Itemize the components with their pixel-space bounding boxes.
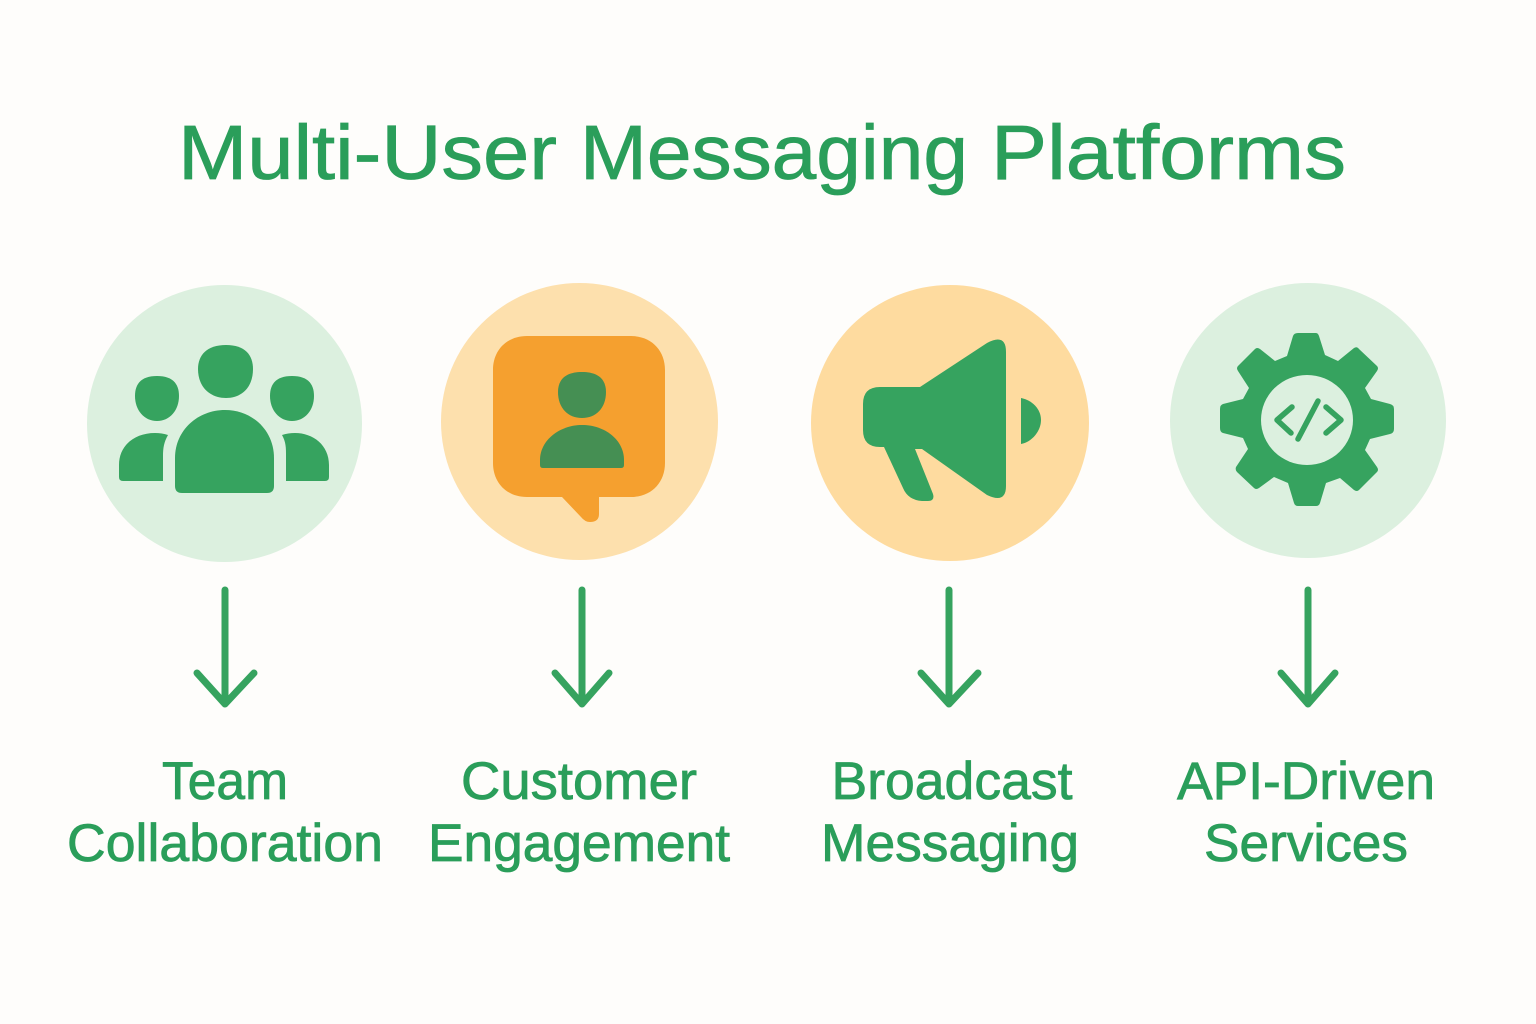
icon: customer chat xyxy=(441,283,718,560)
icon: megaphone xyxy=(811,285,1089,561)
arrow: team xyxy=(197,590,254,704)
label: team collaboration xyxy=(67,752,383,873)
title: Messaging xyxy=(580,110,968,196)
panel: customer engagement xyxy=(428,283,730,873)
arrow: broadcast xyxy=(921,590,978,704)
title: Platforms xyxy=(991,110,1346,196)
label: api-driven services: Services xyxy=(1204,814,1408,873)
label: customer engagement xyxy=(428,752,730,873)
arrow: customer xyxy=(555,590,609,704)
icon: code gear xyxy=(1170,283,1446,558)
label: customer engagement: Engagement xyxy=(428,814,730,873)
label: api-driven services xyxy=(1177,752,1435,873)
title: Multi-User xyxy=(178,110,557,196)
icon: team circle xyxy=(87,285,362,562)
arrow: api xyxy=(1281,590,1335,704)
label: broadcast messaging: Broadcast xyxy=(832,752,1073,811)
panel: api-driven services xyxy=(1170,283,1446,873)
label: team collaboration: Team xyxy=(162,752,288,811)
label: broadcast messaging: Messaging xyxy=(821,814,1079,873)
label: team collaboration: Collaboration xyxy=(67,814,383,873)
label: broadcast messaging xyxy=(821,752,1079,873)
label: customer engagement: Customer xyxy=(461,752,697,811)
label: api-driven services: API-Driven xyxy=(1177,752,1435,811)
panel: team collaboration xyxy=(67,285,383,873)
panel: broadcast messaging xyxy=(811,285,1089,873)
